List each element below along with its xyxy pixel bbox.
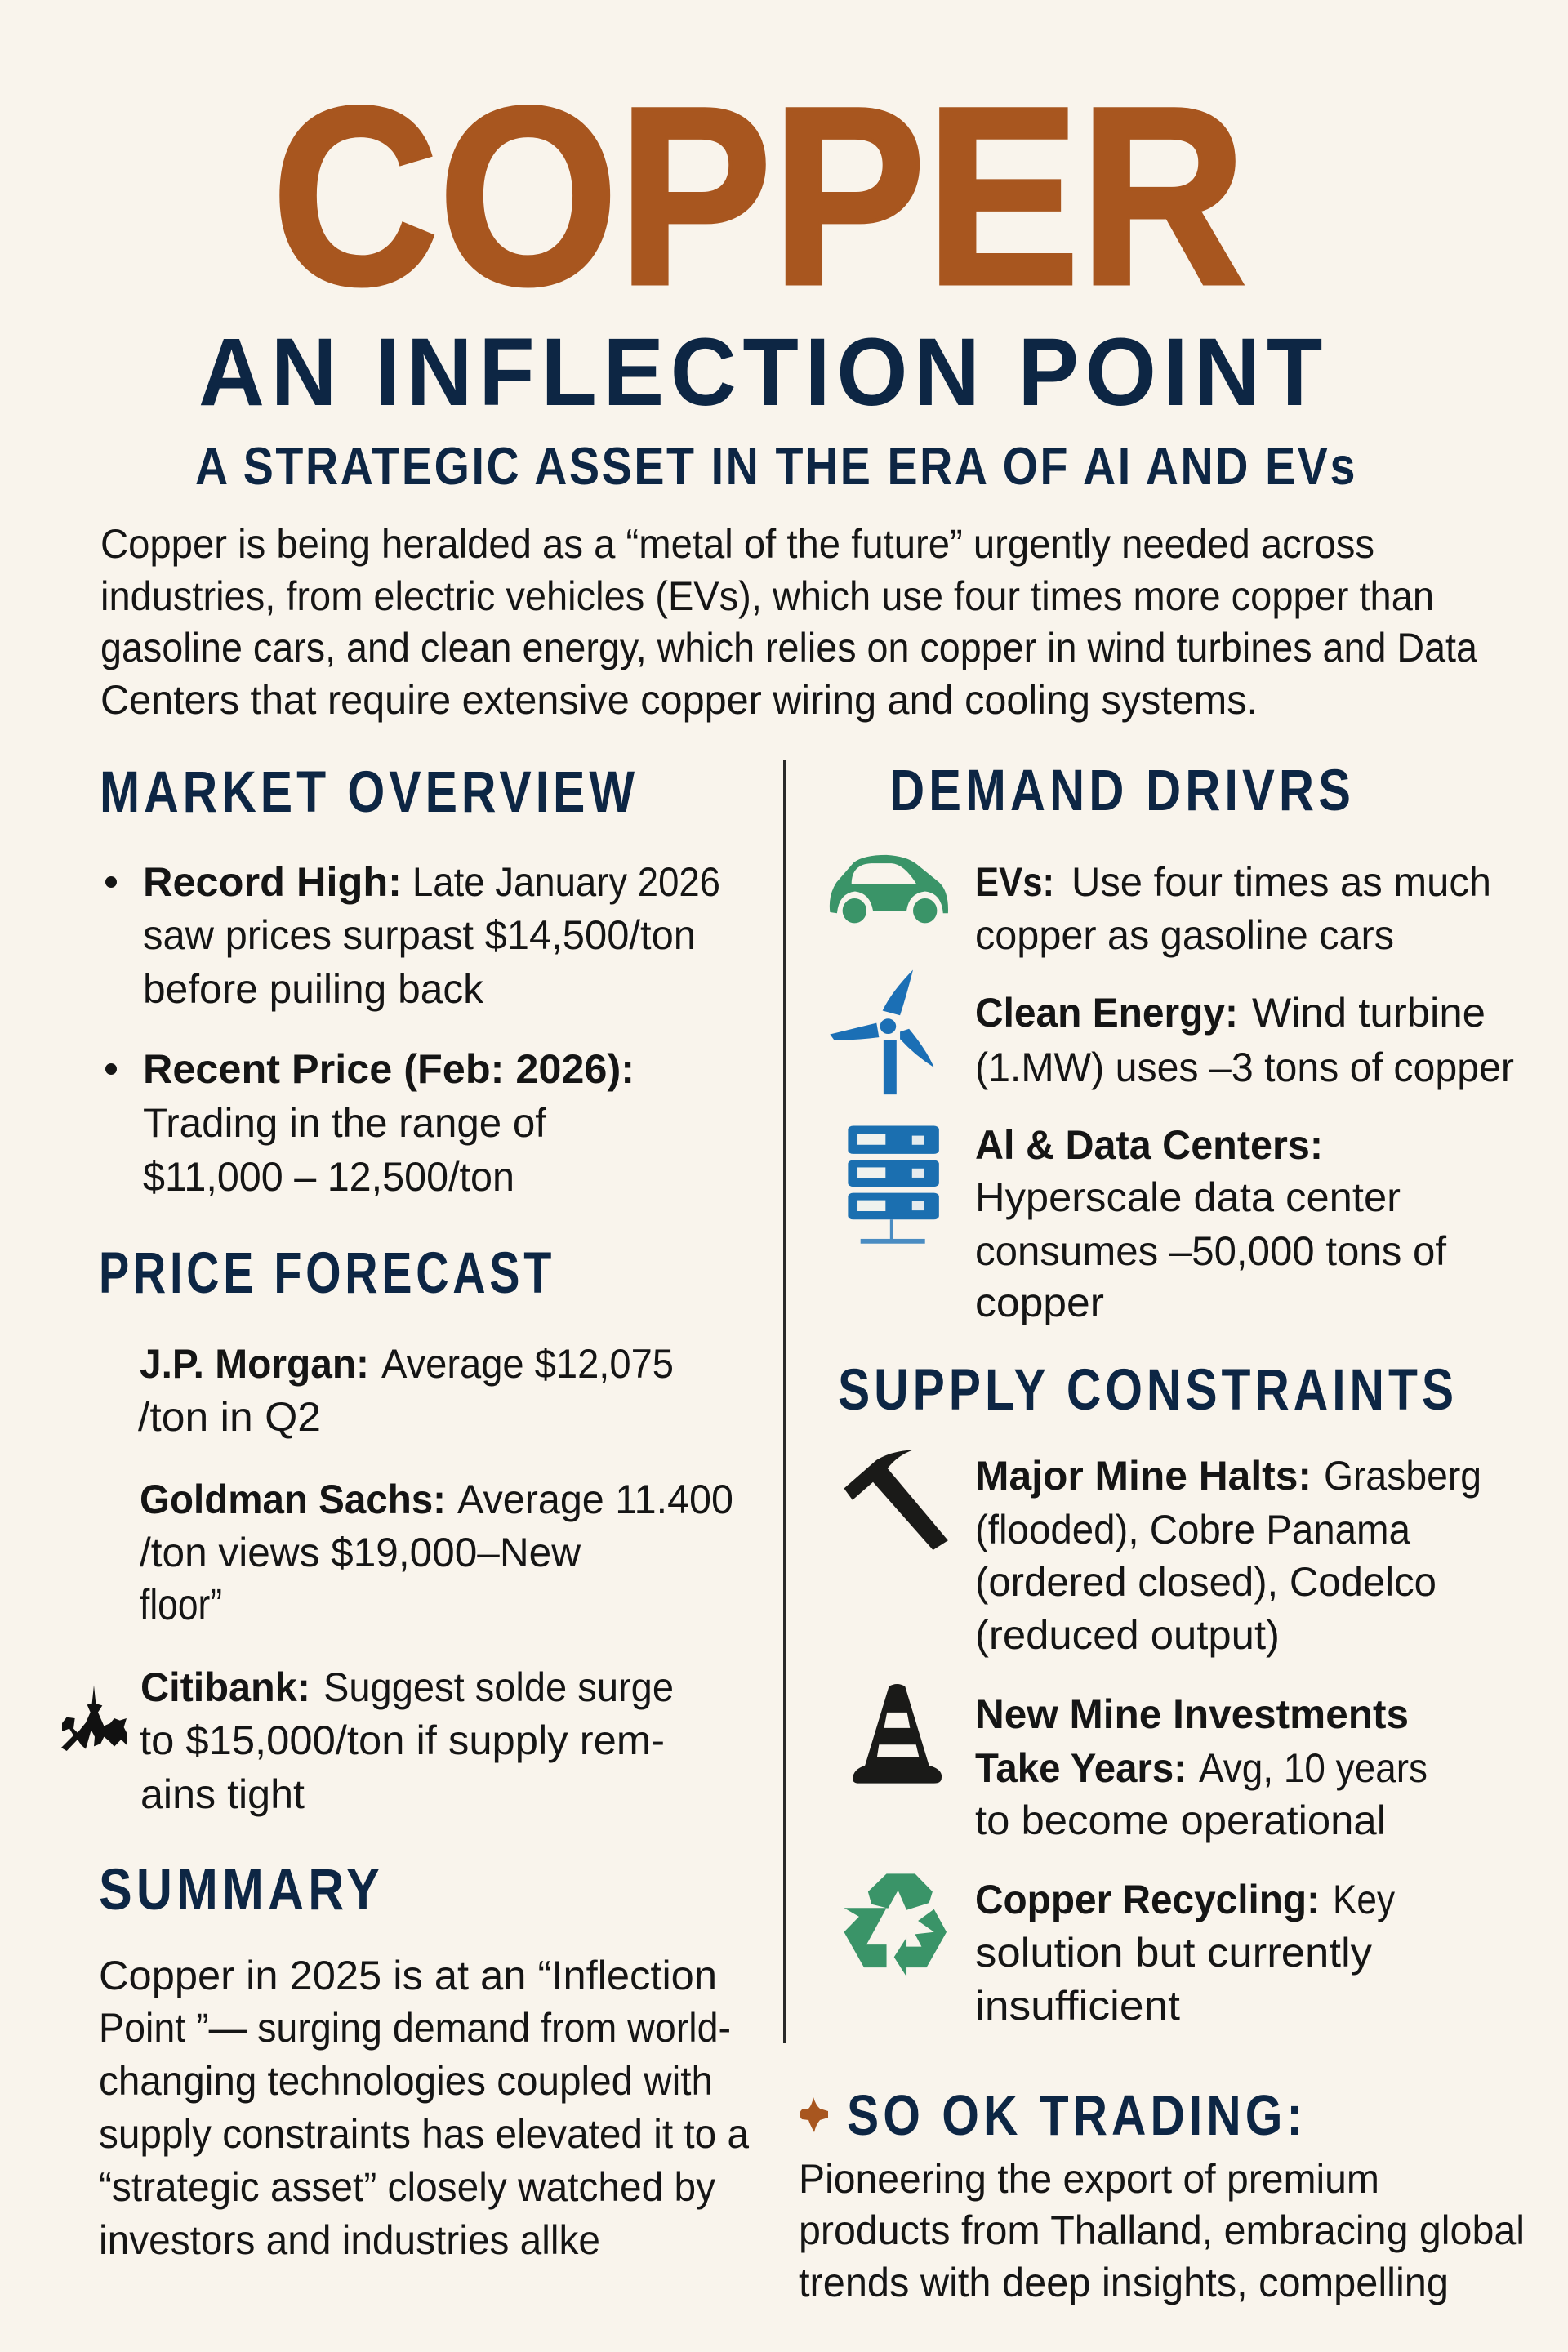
forecast: Citibank: Citibank: (140, 1664, 310, 1710)
heading: market overview: MARKET OVERVIEW (100, 760, 639, 825)
bullet: recent price: Trading in the range of (143, 1100, 546, 1146)
subtitle: A STRATEGIC ASSET IN THE ERA OF AI AND EVs (195, 436, 1357, 496)
item: EVs: copper as gasoline cars (975, 912, 1394, 958)
bullet: recent price (105, 1046, 635, 1200)
item: new mine investments: New Mine Investments (975, 1691, 1409, 1737)
item: clean energy: Wind turbine (1252, 990, 1486, 1036)
panel: market overview (100, 760, 720, 1200)
item: copper recycling (975, 1877, 1395, 2029)
panel: So OK Trading (799, 2083, 1525, 2305)
bullet: record high: before puiling back (143, 966, 484, 1012)
intro paragraph: Copper is being heralded as a “metal of the future” urgently needed across (100, 521, 1374, 567)
item: new mine investments: Take Years: (975, 1745, 1187, 1791)
forecast: JP Morgan: J.P. Morgan: (140, 1341, 369, 1387)
bullet: recent price: Recent Price (Feb: 2026): (143, 1046, 635, 1092)
item: copper recycling: Copper Recycling: (975, 1877, 1320, 1922)
forecast: JP Morgan: /ton in Q2 (138, 1394, 321, 1440)
item: EVs: EVs: (975, 859, 1054, 905)
summary paragraph: Point ”— surging demand from world- (99, 2005, 731, 2051)
forecast: Goldman Sachs (140, 1477, 733, 1629)
summary paragraph: “strategic asset” closely watched by (99, 2164, 715, 2210)
item: new mine investments: Avg, 10 years (1199, 1745, 1428, 1791)
trading paragraph: products from Thalland, embracing global (799, 2207, 1525, 2253)
item: copper recycling: solution but currently (975, 1930, 1372, 1976)
item: major mine halts: (ordered closed), Codelco (975, 1559, 1437, 1605)
intro paragraph: gasoline cars, and clean energy, which relies on copper in wind turbines and Data (100, 625, 1477, 670)
forecast: JP Morgan: Average $12,075 (381, 1341, 674, 1387)
heading: An Inflection Point: AN INFLECTION POINT (198, 318, 1329, 426)
forecast: Citibank (140, 1664, 674, 1817)
intro paragraph: Centers that require extensive copper wiring and cooling systems. (100, 677, 1258, 723)
heading: price forecast: PRICE FORECAST (99, 1241, 555, 1306)
bullet: record high (105, 859, 720, 1012)
forecast: Goldman Sachs: Average 11.400 (457, 1477, 733, 1522)
item: AI and data centers: Al & Data Centers: (975, 1122, 1323, 1168)
icon: pickaxe (844, 1450, 948, 1550)
item: AI and data centers: Hyperscale data center (975, 1174, 1401, 1220)
trading paragraph: trends with deep insights, compelling (799, 2260, 1449, 2305)
item: AI and data centers: consumes –50,000 tons of (975, 1228, 1446, 1274)
icon: electric car (830, 855, 948, 923)
summary paragraph: investors and industries allke (99, 2217, 600, 2263)
forecast: Goldman Sachs: /ton views $19,000–New (140, 1530, 581, 1575)
item: EVs: Use four times as much (1071, 859, 1491, 905)
heading: demand drivers: DEMAND DRIVRS (889, 759, 1355, 823)
bullet: record high: saw prices surpast $14,500/ton (143, 912, 696, 958)
panel: summary (99, 1858, 749, 2263)
item: clean energy: (1.MW) uses –3 tons of copper (975, 1045, 1514, 1090)
icon: traffic cone (853, 1684, 942, 1784)
item: copper recycling: Key (1333, 1877, 1395, 1922)
bullet: record high: Record High: (143, 859, 402, 905)
icon: wind turbine (830, 969, 934, 1094)
panel: price forecast (61, 1241, 733, 1817)
trading paragraph (799, 2156, 1525, 2305)
item: major mine halts: (flooded), Cobre Panama (975, 1507, 1410, 1552)
item: clean energy: Clean Energy: (975, 990, 1238, 1036)
forecast: Citibank: ains tight (140, 1771, 305, 1817)
item: copper recycling: insufficient (975, 1983, 1180, 2029)
item: new mine investments (975, 1691, 1428, 1843)
forecast: Citibank: Suggest solde surge (323, 1664, 674, 1710)
forecast: JP Morgan (138, 1341, 674, 1440)
bullet: recent price: $11,000 – 12,500/ton (143, 1154, 514, 1200)
icon: copper sparkle (800, 2097, 828, 2132)
heading: So OK Trading: SO OK TRADING: (847, 2083, 1307, 2147)
summary paragraph: Copper in 2025 is at an “Inflection (99, 1953, 717, 1998)
item: AI and data centers: copper (975, 1280, 1104, 1325)
summary paragraph: changing technologies coupled with (99, 2058, 713, 2104)
item: new mine investments: to become operational (975, 1797, 1386, 1843)
icon: recycling (844, 1873, 947, 1976)
icon: tower silhouette (61, 1685, 127, 1751)
title: COPPER: COPPER (272, 54, 1246, 337)
item: major mine halts: Major Mine Halts: (975, 1453, 1312, 1499)
heading: summary: SUMMARY (99, 1858, 384, 1922)
intro paragraph (100, 521, 1477, 723)
trading paragraph: Pioneering the export of premium (799, 2156, 1379, 2202)
intro paragraph: industries, from electric vehicles (EVs), which use four times more copper than (100, 573, 1434, 619)
panel: demand drivers (830, 759, 1514, 1325)
forecast: Citibank: to $15,000/ton if supply rem- (140, 1717, 665, 1763)
forecast: Goldman Sachs: Goldman Sachs: (140, 1477, 446, 1522)
summary paragraph: supply constraints has elevated it to a (99, 2111, 749, 2157)
bullet: record high: Late January 2026 (412, 859, 720, 905)
item: AI and data centers (975, 1122, 1446, 1325)
item: EVs (975, 859, 1491, 958)
heading: supply constraints: SUPPLY CONSTRAINTS (838, 1358, 1458, 1423)
summary paragraph (99, 1953, 749, 2263)
item: major mine halts: (reduced output) (975, 1612, 1280, 1658)
item: clean energy (975, 990, 1514, 1090)
item: major mine halts (975, 1453, 1481, 1658)
forecast: Goldman Sachs: floor” (140, 1580, 222, 1629)
icon: server rack (848, 1126, 939, 1244)
panel: supply constraints (838, 1358, 1481, 2029)
item: major mine halts: Grasberg (1324, 1453, 1481, 1499)
